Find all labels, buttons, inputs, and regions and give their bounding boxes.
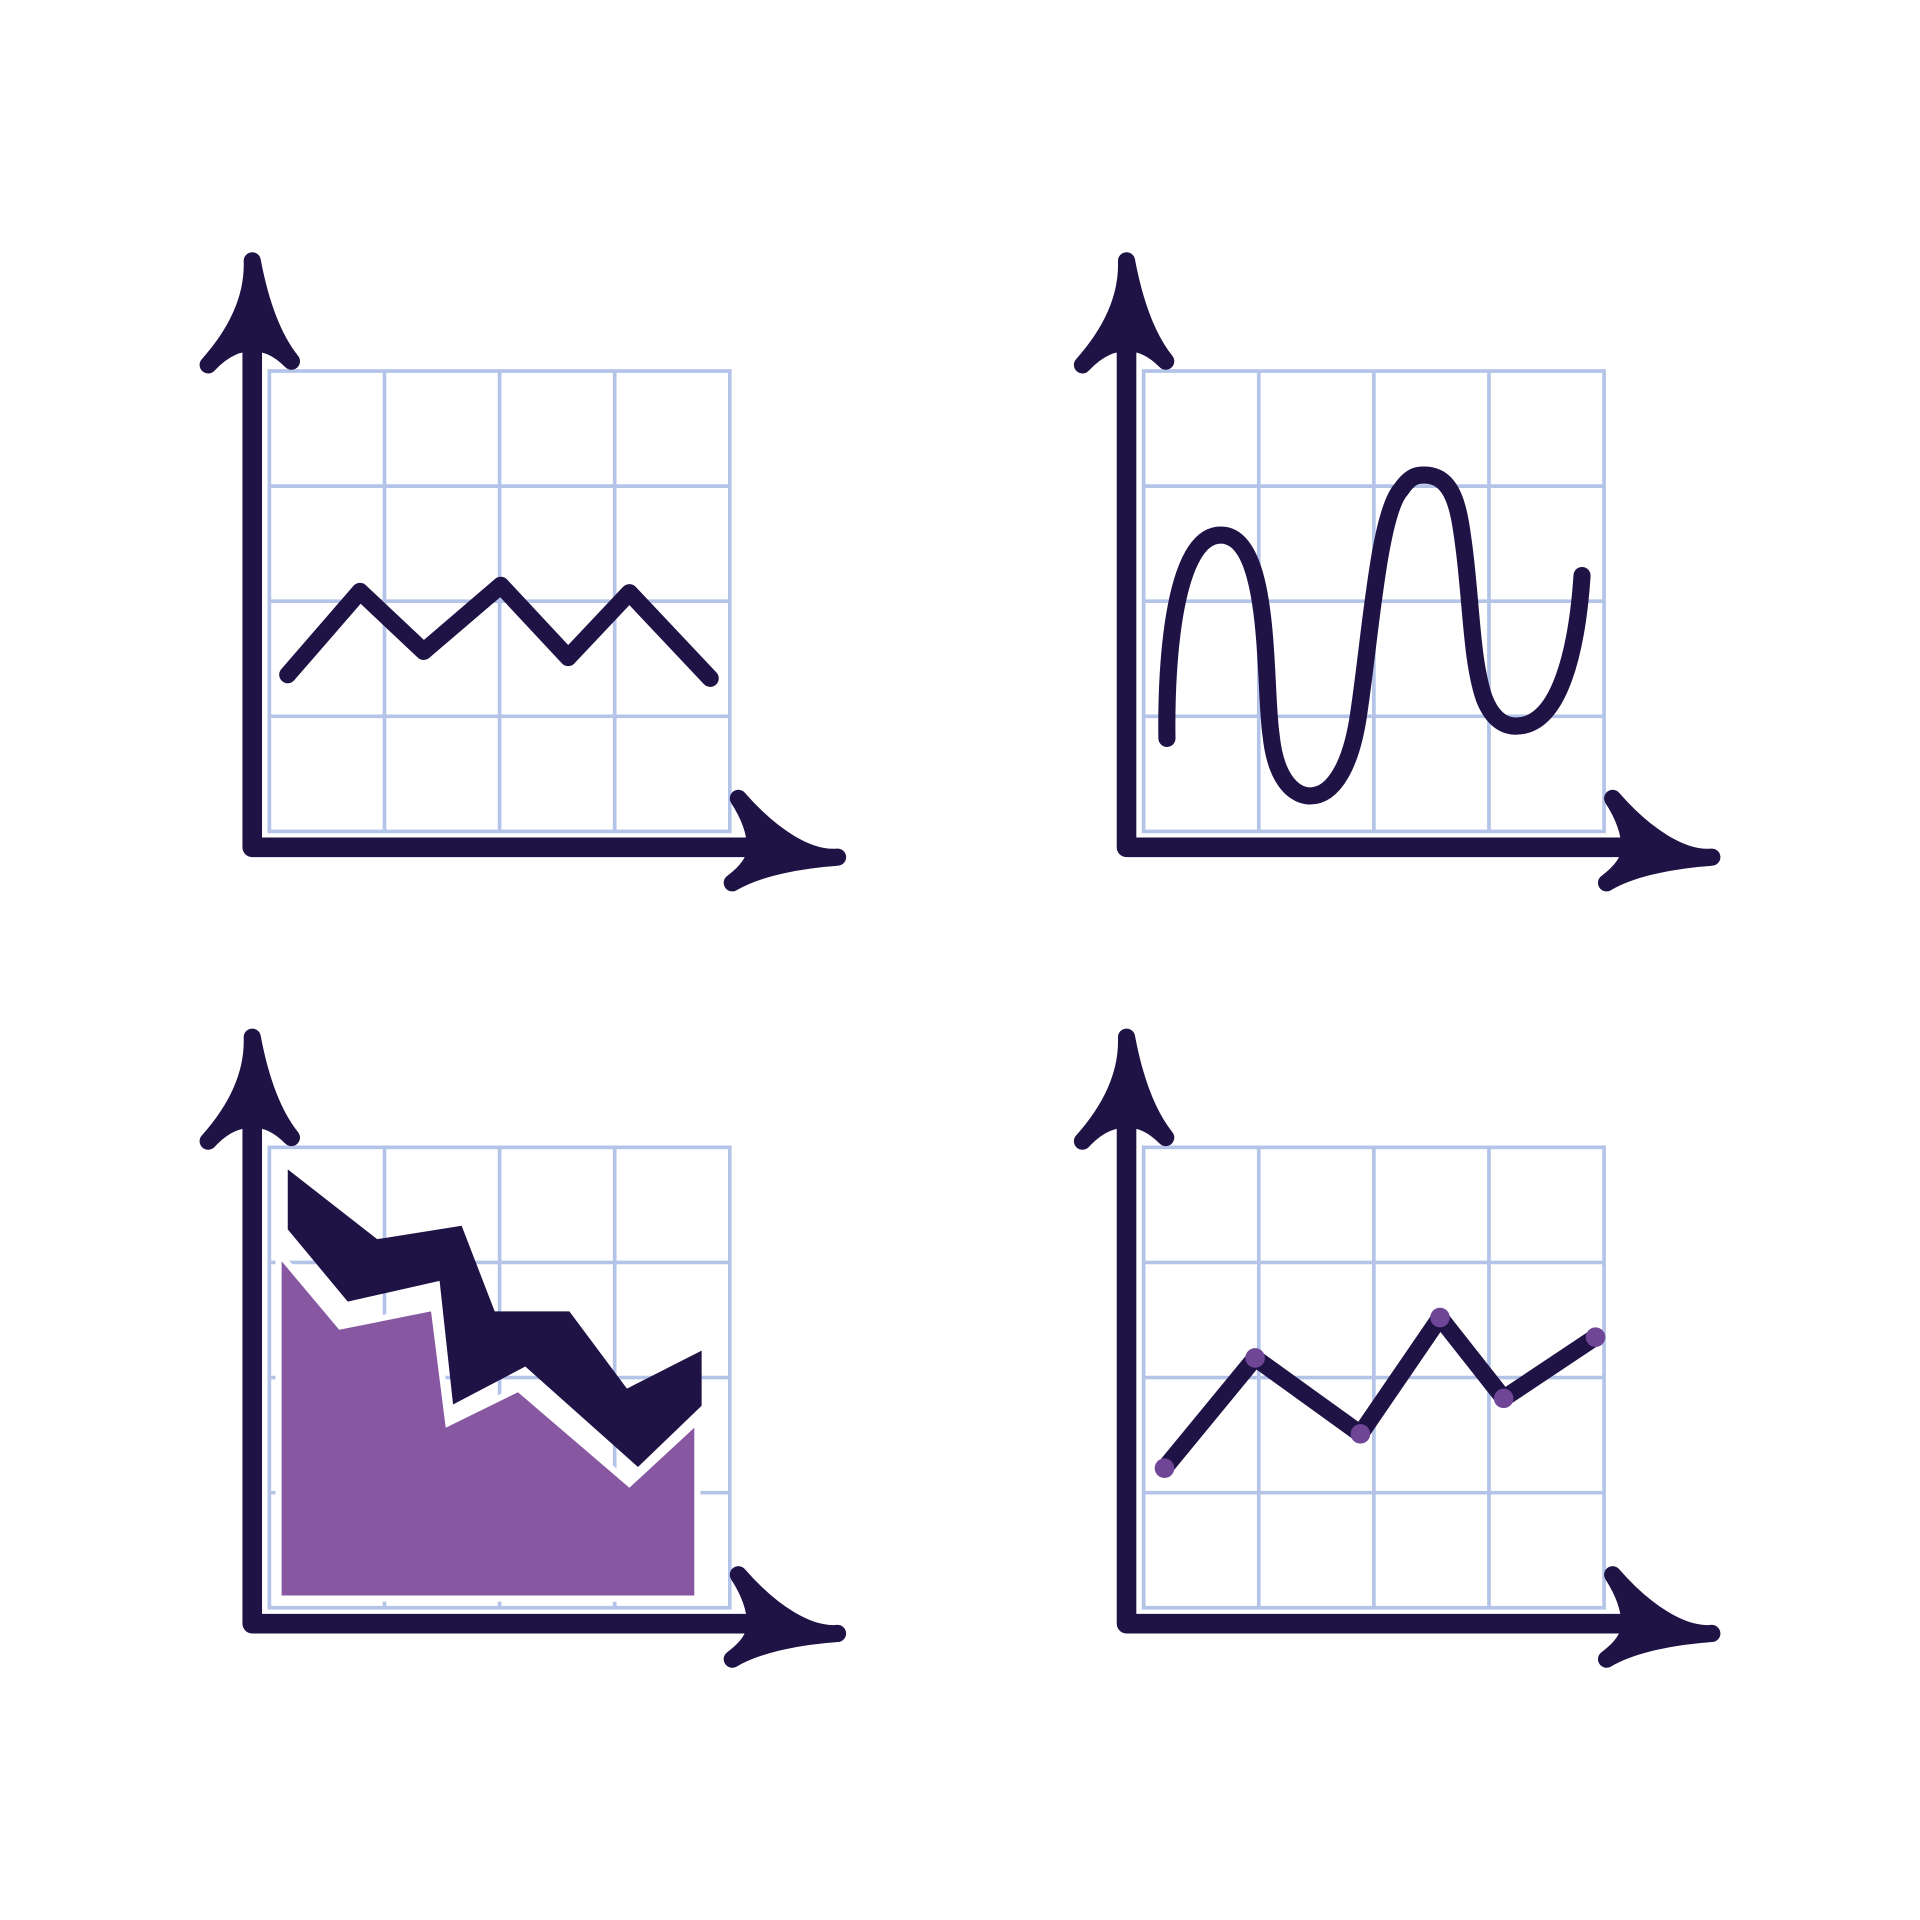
zigzag line bbox=[288, 585, 710, 678]
purple area bbox=[282, 1261, 694, 1596]
panel: zigzag line chart bbox=[208, 261, 838, 883]
wave curve bbox=[1167, 475, 1582, 796]
dark band bbox=[288, 1169, 702, 1467]
panel: dotted line chart bbox=[1082, 1037, 1712, 1659]
panel: wave curve chart bbox=[1082, 261, 1712, 883]
line with markers bbox=[1164, 1318, 1596, 1468]
panel: area chart bbox=[208, 1037, 838, 1659]
